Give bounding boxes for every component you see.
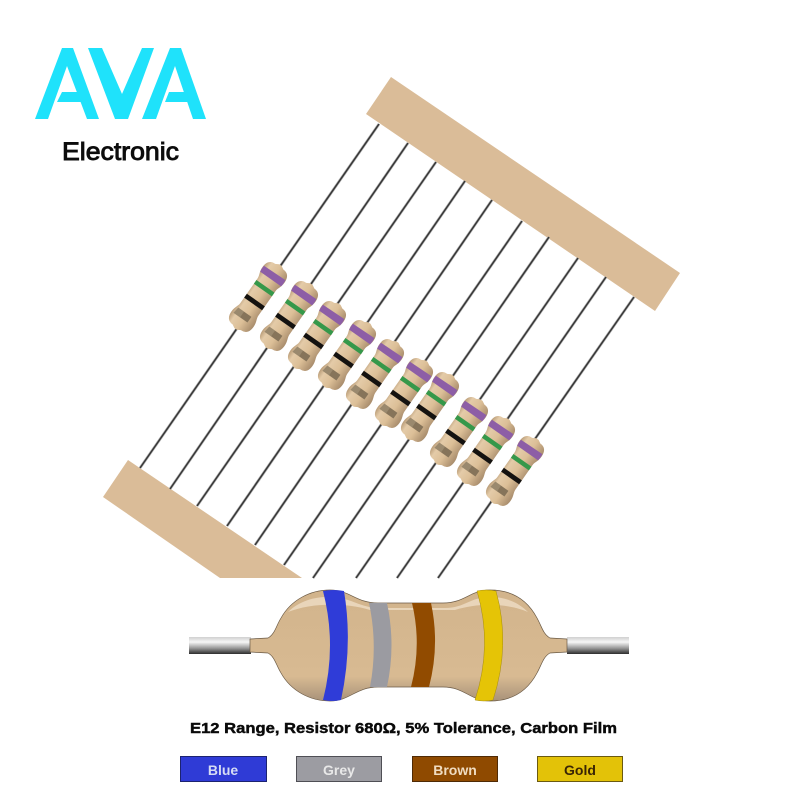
band: gold — [475, 590, 503, 701]
resistor 2 — [170, 143, 408, 489]
resistor 1 — [140, 124, 379, 468]
left lead — [189, 637, 251, 654]
large resistor diagram — [189, 590, 629, 701]
top paper tape — [366, 77, 680, 311]
logo: AVA Electronic — [35, 48, 206, 166]
resistor body — [250, 590, 567, 701]
right lead — [567, 637, 629, 654]
resistor 8 — [356, 258, 578, 578]
bottom paper tape — [103, 460, 302, 578]
swatch: Brown — [412, 756, 498, 782]
band: grey — [369, 603, 392, 687]
logo mark: AVA letters — [35, 48, 206, 119]
swatch: Grey — [296, 756, 382, 782]
resistor 10 — [438, 297, 634, 578]
swatch: Brown: Brown — [433, 762, 477, 778]
swatch: Blue — [180, 756, 266, 782]
caption: E12 Range, Resistor 680Ω, 5% Tolerance, Carbon Film — [190, 720, 617, 737]
band: blue — [323, 590, 348, 701]
logo text: Electronic: Electronic — [62, 138, 179, 166]
swatch: Gold — [538, 756, 622, 782]
swatch: Blue: Blue — [208, 762, 238, 778]
swatch: Grey: Grey — [323, 762, 355, 778]
resistor 4 — [227, 181, 465, 526]
band: brown — [411, 603, 435, 687]
resistor 5 — [255, 200, 492, 545]
resistor strip: ten axial resistors on leads — [140, 124, 634, 578]
body highlight — [288, 597, 528, 612]
legend: colour swatches — [180, 756, 622, 782]
resistor 7 — [313, 237, 549, 578]
swatch: Gold: Gold — [564, 762, 596, 778]
resistor 6 — [284, 221, 522, 565]
resistor 3 — [197, 162, 436, 506]
resistor 9 — [397, 277, 606, 578]
